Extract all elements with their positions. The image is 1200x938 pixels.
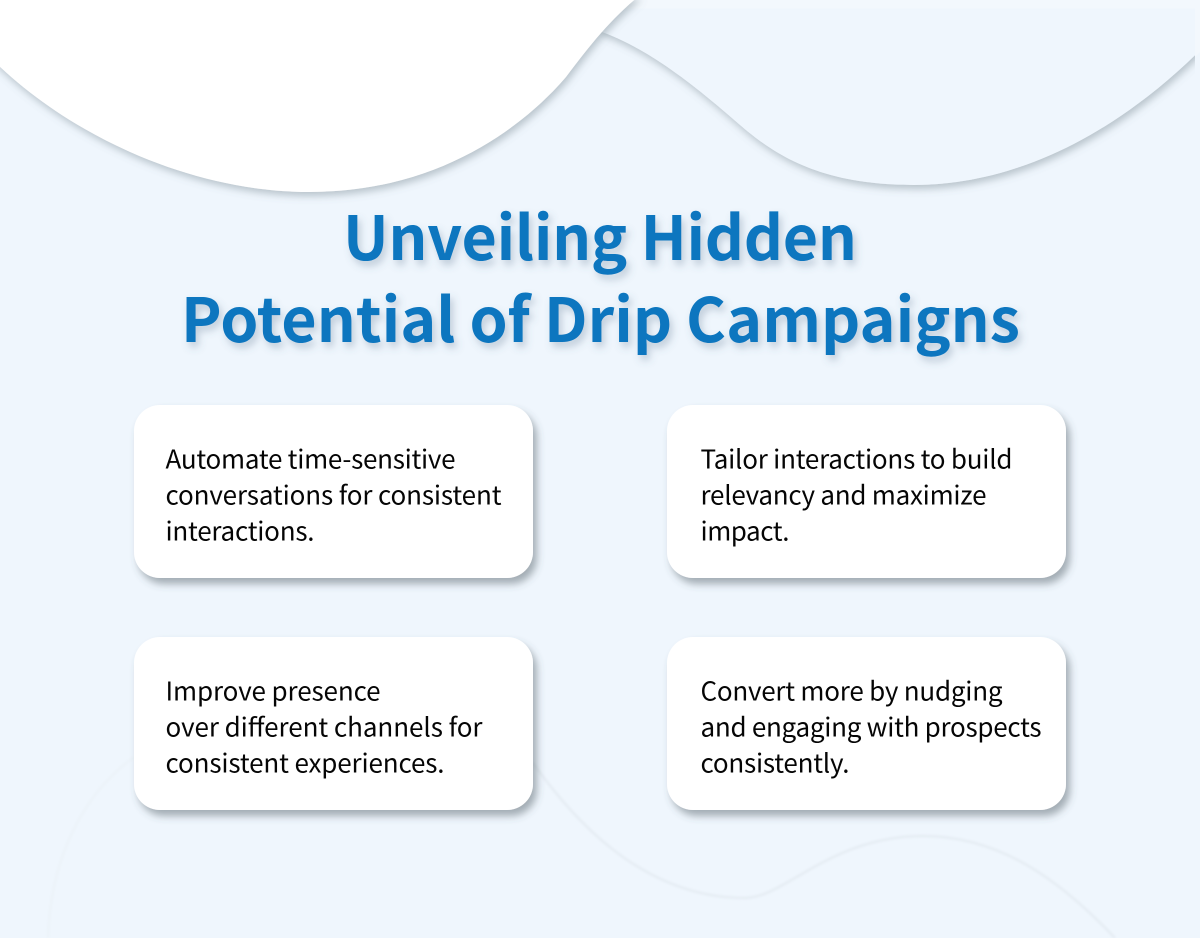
panel: improve [134, 637, 533, 810]
panel: improve: consistent experiences. [166, 744, 444, 780]
panel: improve: Improve presence [166, 672, 380, 708]
panel: automate: interactions. [166, 512, 314, 548]
panel: tailor: Tailor interactions to build [700, 440, 1012, 476]
panel: tailor: relevancy and maximize [700, 476, 986, 512]
panel: tailor [667, 405, 1066, 578]
panel: automate: Automate time-sensitive [166, 440, 456, 476]
faint bottom-right wave [533, 763, 1115, 938]
panel: automate: conversations for consistent [166, 476, 502, 512]
panel: convert: consistently. [700, 744, 850, 780]
title [181, 189, 1020, 360]
panel: automate [134, 405, 533, 578]
panel: tailor: impact. [700, 512, 790, 548]
panel: convert [667, 637, 1066, 810]
title: Unveiling Hidden [343, 189, 857, 278]
title: Potential of Drip Campaigns [181, 271, 1020, 360]
top-right wave shape [601, 32, 1195, 193]
top-left white blob [0, 0, 640, 192]
panel: improve: over different channels for [166, 708, 483, 744]
panel: convert: Convert more by nudging [700, 672, 1003, 708]
faint bottom-left wave [48, 757, 134, 938]
panel: convert: and engaging with prospects [700, 708, 1042, 744]
top-right pale band [625, 0, 1200, 57]
